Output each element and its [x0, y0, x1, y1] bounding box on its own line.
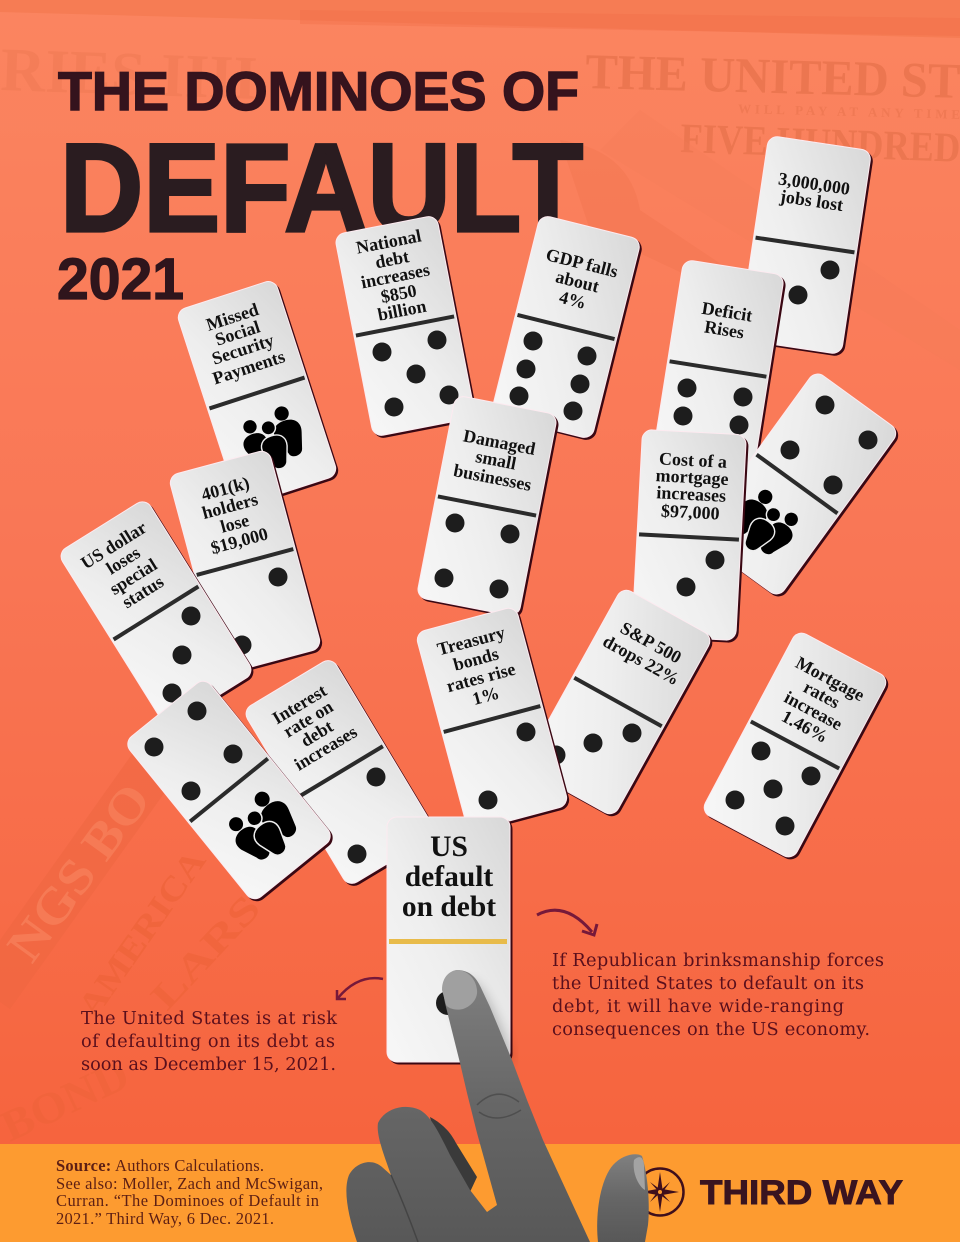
domino face: Payments	[210, 346, 287, 388]
domino face: Missed	[204, 299, 261, 335]
domino: damaged small businesses	[416, 395, 558, 617]
domino face	[652, 259, 784, 479]
domino face: holders	[200, 489, 260, 523]
domino face: GDP falls	[544, 244, 620, 282]
domino face: drops 22%	[600, 631, 683, 689]
domino face: Interest	[269, 680, 330, 728]
pips	[144, 702, 242, 800]
source text: 2021.” Third Way, 6 Dec. 2021.	[56, 1209, 274, 1228]
domino face	[387, 817, 510, 1062]
domino face: status	[118, 571, 167, 612]
domino face: $97,000	[661, 501, 720, 524]
domino face	[491, 214, 641, 440]
domino face: S&P 500	[617, 618, 685, 667]
domino: US dollar	[57, 498, 255, 728]
domino face: rates	[800, 677, 843, 712]
domino: US default on debt	[387, 817, 510, 1062]
domino: GDP falls	[491, 214, 641, 440]
arrow: right note	[537, 910, 597, 935]
source text: Source: Authors Calculations.	[56, 1156, 264, 1175]
domino face	[124, 677, 334, 903]
domino: four pips and people, left	[124, 677, 334, 903]
domino face: mortgage	[655, 465, 729, 489]
domino: national debt	[334, 215, 476, 437]
pips	[232, 568, 288, 654]
text block: left note: of defaulting on its debt as	[81, 1031, 335, 1052]
footer band	[0, 1144, 960, 1242]
title line: the dominoes of: THE DOMINOES OF	[58, 60, 579, 122]
domino face	[523, 587, 713, 817]
logo wordmark: THIRD WAY	[700, 1174, 903, 1212]
domino face: 3,000,000	[777, 168, 851, 199]
pips	[372, 330, 458, 416]
title	[57, 60, 583, 312]
domino face: $850	[379, 280, 418, 307]
domino face: 1%	[470, 683, 501, 709]
domino face: bonds	[451, 643, 501, 675]
domino: mortgage rates	[701, 630, 889, 860]
pips	[780, 396, 878, 494]
domino face: about	[554, 266, 601, 296]
thumb nail	[634, 1157, 645, 1190]
gold divider	[389, 939, 507, 944]
compass mark	[636, 1168, 684, 1216]
domino face: 401(k)	[199, 473, 252, 506]
text block: right note: debt, it will have wide-ranging	[552, 996, 844, 1017]
domino: deficit rises	[652, 259, 784, 479]
domino face	[242, 657, 438, 887]
domino face: 1.46%	[778, 706, 831, 747]
domino: interest rate on debt	[242, 657, 438, 887]
domino face: Social	[213, 316, 263, 350]
source text: Curran. “The Dominoes of Default in	[56, 1191, 319, 1210]
domino face: Damaged	[462, 425, 537, 459]
knuckle crease	[477, 1094, 521, 1118]
domino face: National	[354, 225, 423, 258]
hand silhouette	[346, 970, 590, 1242]
domino face: special	[106, 554, 161, 599]
thumb	[597, 1154, 649, 1242]
text block: left note: The United States is at risk	[81, 1008, 337, 1029]
domino face: lose	[218, 510, 251, 537]
domino face: billion	[376, 296, 428, 325]
domino face	[416, 395, 558, 617]
domino face: Rises	[703, 316, 746, 342]
arrow: left note	[337, 978, 383, 999]
domino face	[57, 498, 255, 728]
domino: S&P 500	[523, 587, 713, 817]
banknote background top	[0, 0, 960, 370]
domino face: Security	[209, 330, 276, 369]
domino label: default	[405, 861, 493, 893]
icon: people	[235, 402, 311, 477]
domino: treasury bonds	[415, 606, 569, 832]
text block: right note: the United States to default on its	[552, 973, 864, 994]
domino face: Cost of a	[659, 448, 728, 472]
domino: missed social security	[176, 279, 338, 507]
banknote background top: WILL PAY AT ANY TIME	[738, 101, 960, 122]
curled finger behind	[430, 1117, 477, 1192]
domino face	[415, 606, 569, 832]
pips	[546, 724, 642, 764]
domino face: loses	[103, 542, 144, 578]
domino label: on debt	[402, 891, 496, 923]
text block: right note: If Republican brinksmanship forces	[552, 950, 884, 971]
domino: 401(k) holders	[168, 449, 322, 675]
pips	[434, 514, 520, 598]
finger shadow	[450, 980, 512, 1062]
banknote background bottom left	[0, 743, 269, 1151]
domino face: increase	[781, 687, 846, 734]
domino face: Treasury	[435, 622, 507, 659]
pips	[162, 606, 200, 702]
pips	[726, 742, 820, 836]
domino face	[176, 279, 338, 507]
logo: Third Way	[636, 1168, 903, 1216]
domino face: US dollar	[77, 517, 150, 573]
pips	[674, 378, 752, 434]
nail	[442, 970, 477, 1010]
pips	[788, 260, 840, 304]
banknote background bottom left: LARS	[143, 887, 269, 1018]
banknote background top: RIES IIII	[0, 36, 258, 113]
domino face	[168, 449, 322, 675]
text block: left note: soon as December 15, 2021.	[81, 1054, 336, 1075]
icon: people	[220, 784, 308, 873]
domino face: Mortgage	[792, 652, 868, 705]
domino face: increases	[359, 259, 431, 292]
domino face: jobs lost	[778, 186, 845, 215]
icon: people	[723, 483, 807, 566]
domino: four pips and people, right	[694, 370, 900, 598]
finger separation line	[391, 1175, 418, 1242]
domino face: Deficit	[700, 298, 754, 326]
domino: 3,000,000 jobs lost	[738, 135, 872, 355]
source text: See also: Moller, Zach and McSwigan,	[56, 1174, 323, 1193]
domino face: debt	[297, 716, 337, 751]
pip	[436, 991, 460, 1015]
title line: default: DEFAULT	[60, 119, 583, 258]
domino face: 4%	[557, 287, 588, 313]
domino face: small	[474, 446, 518, 474]
hand	[346, 970, 649, 1242]
domino face	[334, 215, 476, 437]
pips	[348, 768, 386, 864]
domino face	[632, 429, 746, 641]
domino: cost of a mortgage	[632, 429, 746, 641]
domino face: businesses	[452, 460, 533, 495]
domino face	[694, 370, 900, 598]
domino face: increases	[291, 721, 361, 775]
domino face: $19,000	[208, 524, 270, 558]
domino face	[701, 630, 889, 860]
pips	[676, 550, 724, 596]
domino face: increases	[656, 482, 727, 506]
domino face: debt	[373, 246, 411, 272]
domino label: US	[430, 831, 468, 863]
domino face: rates rise	[444, 659, 517, 696]
text block: right note: consequences on the US economy.	[552, 1019, 870, 1040]
banknote background bottom left: AMERICA	[71, 843, 214, 1025]
pips	[478, 722, 536, 810]
domino face: rate on	[280, 696, 337, 741]
pips	[510, 332, 596, 420]
banknote background bottom left: NGS BO	[0, 773, 161, 971]
domino face	[738, 135, 872, 355]
title line: 2021: 2021	[57, 247, 184, 312]
